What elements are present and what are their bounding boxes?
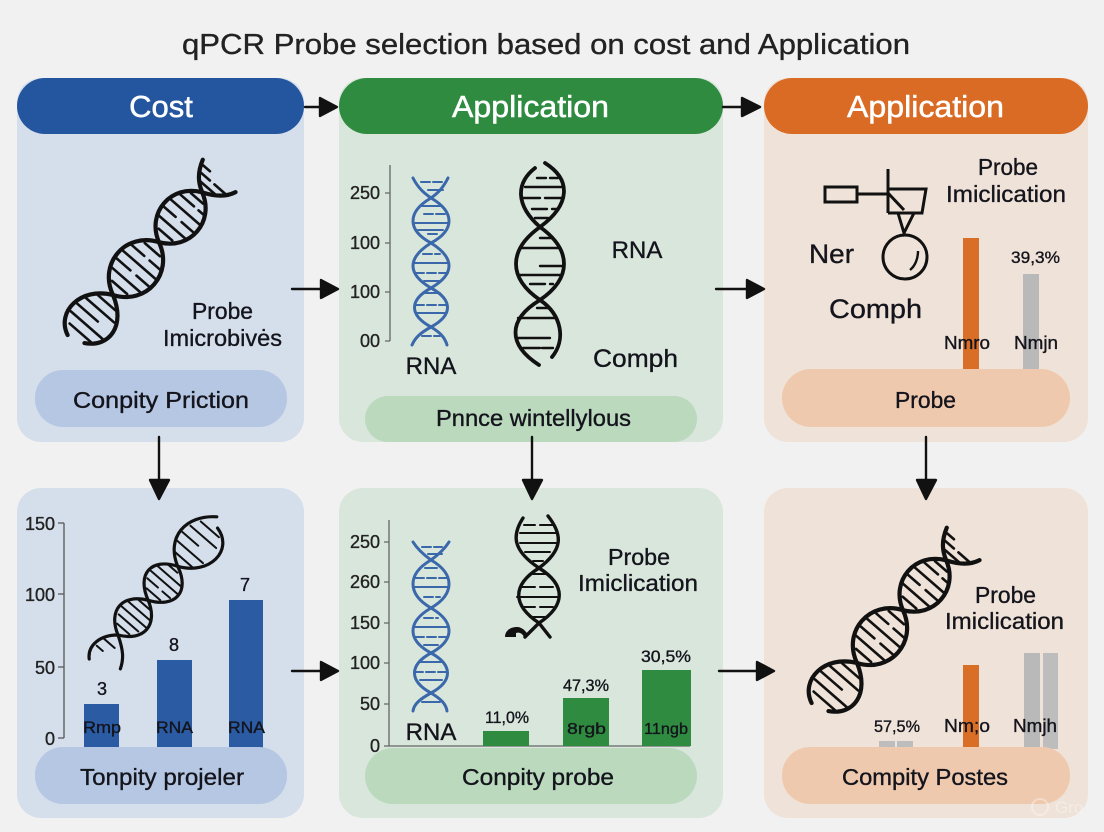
pill: tonpity projeler: Tonpity projeler	[80, 764, 244, 790]
title: qPCR Probe selection based on cost and Application	[182, 29, 910, 61]
text: labels	[406, 237, 678, 380]
bar chart: 39,3%	[1011, 248, 1060, 267]
axis: scale: 250	[350, 532, 380, 552]
axis: scale	[350, 520, 690, 756]
bar chart: 7	[240, 575, 250, 595]
axis: scale: 100	[350, 282, 380, 302]
arrow: row two right	[719, 662, 774, 680]
text: probe implication	[945, 582, 1064, 634]
axis: scale: 00	[360, 331, 380, 351]
bar chart: Nm;o	[944, 716, 990, 736]
text: probe implication: Probe	[608, 544, 670, 570]
panel: application orange top	[764, 78, 1088, 442]
pill: conpity probe	[365, 748, 697, 804]
panel: cost bottom	[17, 488, 304, 818]
icon: diagonal dna helix	[799, 525, 981, 725]
text: probe implication: Probe	[978, 154, 1038, 180]
axis: scale: 250	[350, 183, 380, 203]
panel: application green top	[339, 78, 723, 442]
axis: scale: 0	[45, 729, 55, 749]
bar chart: Nmjn	[1014, 333, 1058, 353]
axis: scale: 150	[350, 613, 380, 633]
axis: scale: 100	[25, 585, 55, 605]
bar chart: Rmp	[83, 718, 121, 737]
bar chart: RNA	[228, 718, 266, 737]
text: ner comph: Comph	[829, 294, 922, 324]
text: labels: RNA	[406, 353, 456, 380]
pill: compity postes: Compity Postes	[842, 764, 1008, 790]
header: cost: Cost	[129, 89, 193, 124]
pill: conpity probe: Conpity probe	[462, 764, 614, 790]
arrow: application to application	[723, 98, 760, 116]
header: cost	[17, 78, 304, 134]
text: labels: Comph	[593, 345, 678, 373]
bar chart	[874, 653, 1058, 749]
panel: application green bottom	[339, 488, 723, 818]
text: labels: RNA	[612, 237, 662, 264]
pill: probe: Probe	[895, 387, 956, 413]
text: probe label	[163, 298, 282, 351]
pill: conpity priction	[35, 370, 287, 427]
text: probe implication: Probe	[975, 582, 1036, 608]
axis: scale: 150	[25, 514, 55, 534]
bar chart	[483, 648, 691, 746]
icon: blue dna helix	[412, 178, 449, 345]
pill: conpity priction: Conpity Priction	[73, 387, 249, 413]
header: application orange: Application	[847, 89, 1004, 124]
arrow: row one right middle	[716, 280, 764, 298]
bar chart: 47,3%	[563, 677, 609, 695]
text: ner comph	[809, 239, 922, 324]
pill: prince wintellylous: Pnnce wintellylous	[436, 405, 631, 431]
text: probe label: Probe	[192, 298, 253, 324]
watermark: Gro	[1055, 798, 1083, 817]
text: ner comph: Ner	[809, 239, 854, 269]
bar chart	[944, 238, 1060, 371]
axis: scale: 100	[350, 233, 380, 253]
arrow: cost to application	[305, 98, 337, 116]
bar chart: RNA	[156, 718, 194, 737]
text: probe implication: Imiclication	[946, 181, 1066, 207]
bar chart: 57,5%	[874, 717, 920, 736]
pill: compity postes	[782, 747, 1070, 804]
text: probe implication: Imiclication	[578, 570, 698, 596]
axis: scale: 0	[370, 736, 380, 756]
text: probe implication: Imiclication	[945, 608, 1064, 634]
arrow: row two left	[292, 662, 338, 680]
icon: blue dna helix	[413, 542, 449, 711]
text: probe label: Imicrobivės	[163, 325, 282, 351]
panel: cost top	[17, 78, 304, 442]
text: rna label: RNA	[406, 719, 456, 746]
text: probe implication	[946, 154, 1066, 207]
axis: scale: 50	[360, 694, 380, 714]
bar chart: 3	[97, 679, 107, 699]
arrow: row one left middle	[292, 280, 338, 298]
bar chart: 30,5%	[641, 648, 691, 666]
arrow: application down	[523, 437, 542, 499]
axis: scale	[25, 514, 64, 749]
header: application green	[339, 78, 723, 134]
panel: application orange bottom	[764, 488, 1088, 818]
bar chart: 8rgb	[567, 721, 606, 738]
bar chart	[83, 575, 266, 748]
arrow: application orange down	[917, 437, 936, 499]
text: probe implication	[578, 544, 698, 596]
icon: small dna helix	[78, 505, 237, 679]
icon: black dna helix	[516, 163, 564, 365]
bar chart: 11,0%	[485, 709, 529, 727]
axis: scale: 100	[350, 653, 380, 673]
axis: scale: 50	[35, 658, 55, 678]
axis: scale	[350, 165, 390, 351]
header: application orange	[764, 78, 1088, 134]
icon: black dna helix	[505, 516, 559, 637]
bar chart: 8	[169, 635, 179, 655]
pill: tonpity projeler	[35, 747, 287, 804]
bar chart: Nmjh	[1013, 716, 1057, 736]
bar chart: Nmro	[944, 333, 990, 353]
icon: probe schematic	[825, 169, 927, 279]
icon: diagonal dna helix	[55, 157, 237, 357]
watermark	[1032, 798, 1083, 817]
bar chart: 11ngb	[644, 721, 688, 738]
pill: prince wintellylous	[365, 396, 697, 442]
arrow: cost down	[150, 437, 169, 499]
header: application green: Application	[452, 89, 609, 124]
pill: probe	[782, 369, 1070, 427]
axis: scale: 260	[350, 572, 380, 592]
